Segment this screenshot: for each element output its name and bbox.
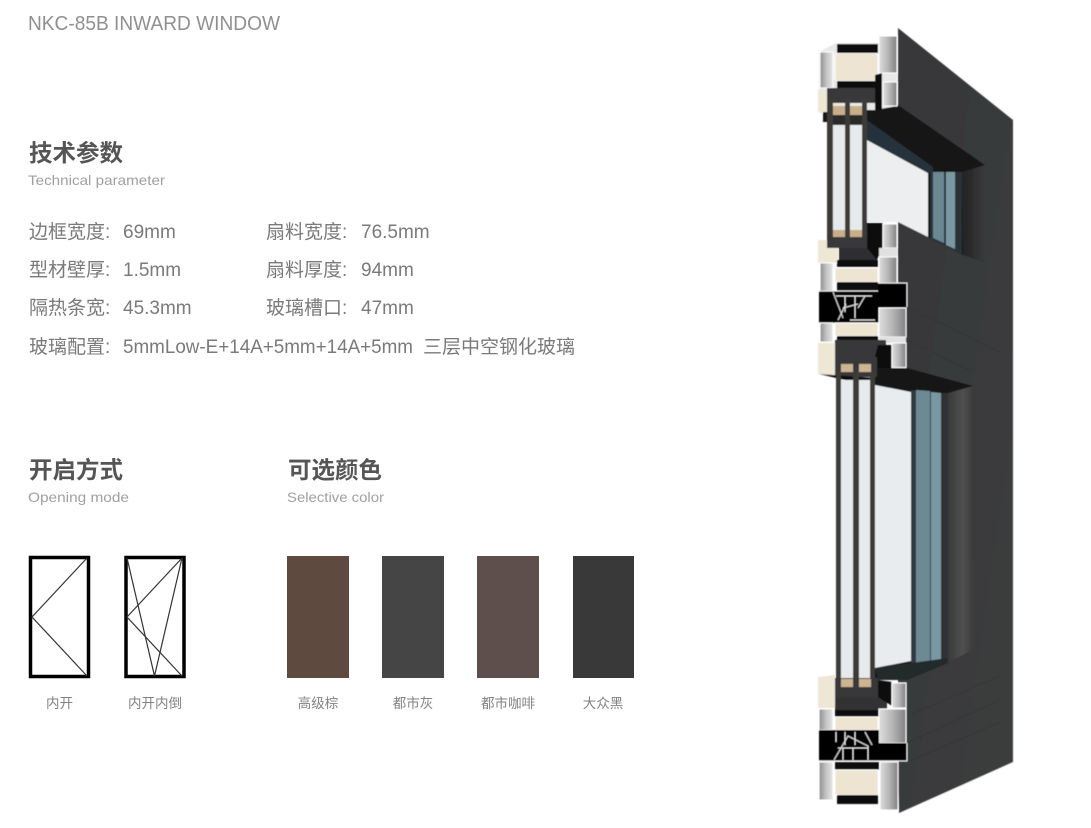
heading: opening mode	[28, 456, 129, 505]
spec: wall thickness: 型材壁厚:	[29, 259, 110, 281]
heading: selective colour: 可选颜色	[288, 457, 382, 483]
heading: selective colour: Selective color	[287, 489, 384, 505]
icon: inward opening and tilt	[126, 558, 184, 676]
label: volkswagen black: 大众黑	[583, 696, 623, 711]
label: inward opening: 内开	[46, 696, 73, 711]
spec: glass configuration: 5mmLow-E+14A+5mm+14A+5mm	[123, 337, 413, 358]
window cross-section illustration	[818, 28, 1013, 813]
spec: glass slot: 47mm	[361, 298, 414, 319]
heading: opening mode: 开启方式	[29, 456, 123, 483]
icon: inward opening	[30, 558, 88, 676]
spec: sash width: 扇料宽度:	[266, 221, 347, 243]
spec: glass configuration: 三层中空钢化玻璃	[423, 336, 575, 358]
spec: glass configuration: 玻璃配置:	[29, 336, 110, 358]
swatch: urban grey	[382, 556, 444, 678]
spec: frame width: 69mm	[123, 222, 176, 243]
swatch: volkswagen black	[573, 556, 634, 678]
heading: opening mode: Opening mode	[28, 489, 129, 505]
heading: technical parameters: 技术参数	[29, 139, 123, 166]
panel: opening mode	[28, 456, 184, 711]
title: NKC-85B INWARD WINDOW	[28, 13, 280, 35]
upper section of profile	[818, 36, 897, 122]
panel: technical parameters	[28, 139, 575, 358]
swatch: premium brown	[287, 556, 349, 678]
heading: selective colour	[287, 457, 384, 505]
outer aluminium face	[898, 28, 1013, 813]
upper opening interior	[867, 105, 985, 262]
spec: sash thickness: 扇料厚度:	[266, 259, 347, 281]
heading: technical parameters: Technical parameter	[28, 172, 165, 188]
upper glass bars	[827, 100, 867, 237]
lower glass bars	[836, 372, 875, 680]
label: urban grey: 都市灰	[393, 695, 433, 711]
label: premium brown: 高级棕	[298, 695, 338, 711]
spec: sash thickness: 94mm	[361, 260, 414, 281]
spec: wall thickness: 1.5mm	[123, 260, 181, 281]
lower opening interior	[875, 368, 973, 680]
spec: thermal strip width: 隔热条宽:	[29, 297, 110, 319]
panel: selective colour	[287, 457, 634, 711]
heading: technical parameters	[28, 139, 165, 188]
label: inward opening and tilt: 内开内倒	[128, 696, 182, 711]
label: urban coffee: 都市咖啡	[481, 695, 535, 711]
face seams	[907, 307, 1000, 762]
bottom section of profile	[818, 675, 907, 810]
spec: glass slot: 玻璃槽口:	[266, 297, 347, 319]
spec: frame width: 边框宽度:	[29, 221, 110, 243]
spec: thermal strip width: 45.3mm	[123, 298, 192, 319]
middle section of profile	[818, 223, 907, 386]
spec: sash width: 76.5mm	[361, 222, 430, 243]
swatch: urban coffee	[477, 556, 539, 678]
